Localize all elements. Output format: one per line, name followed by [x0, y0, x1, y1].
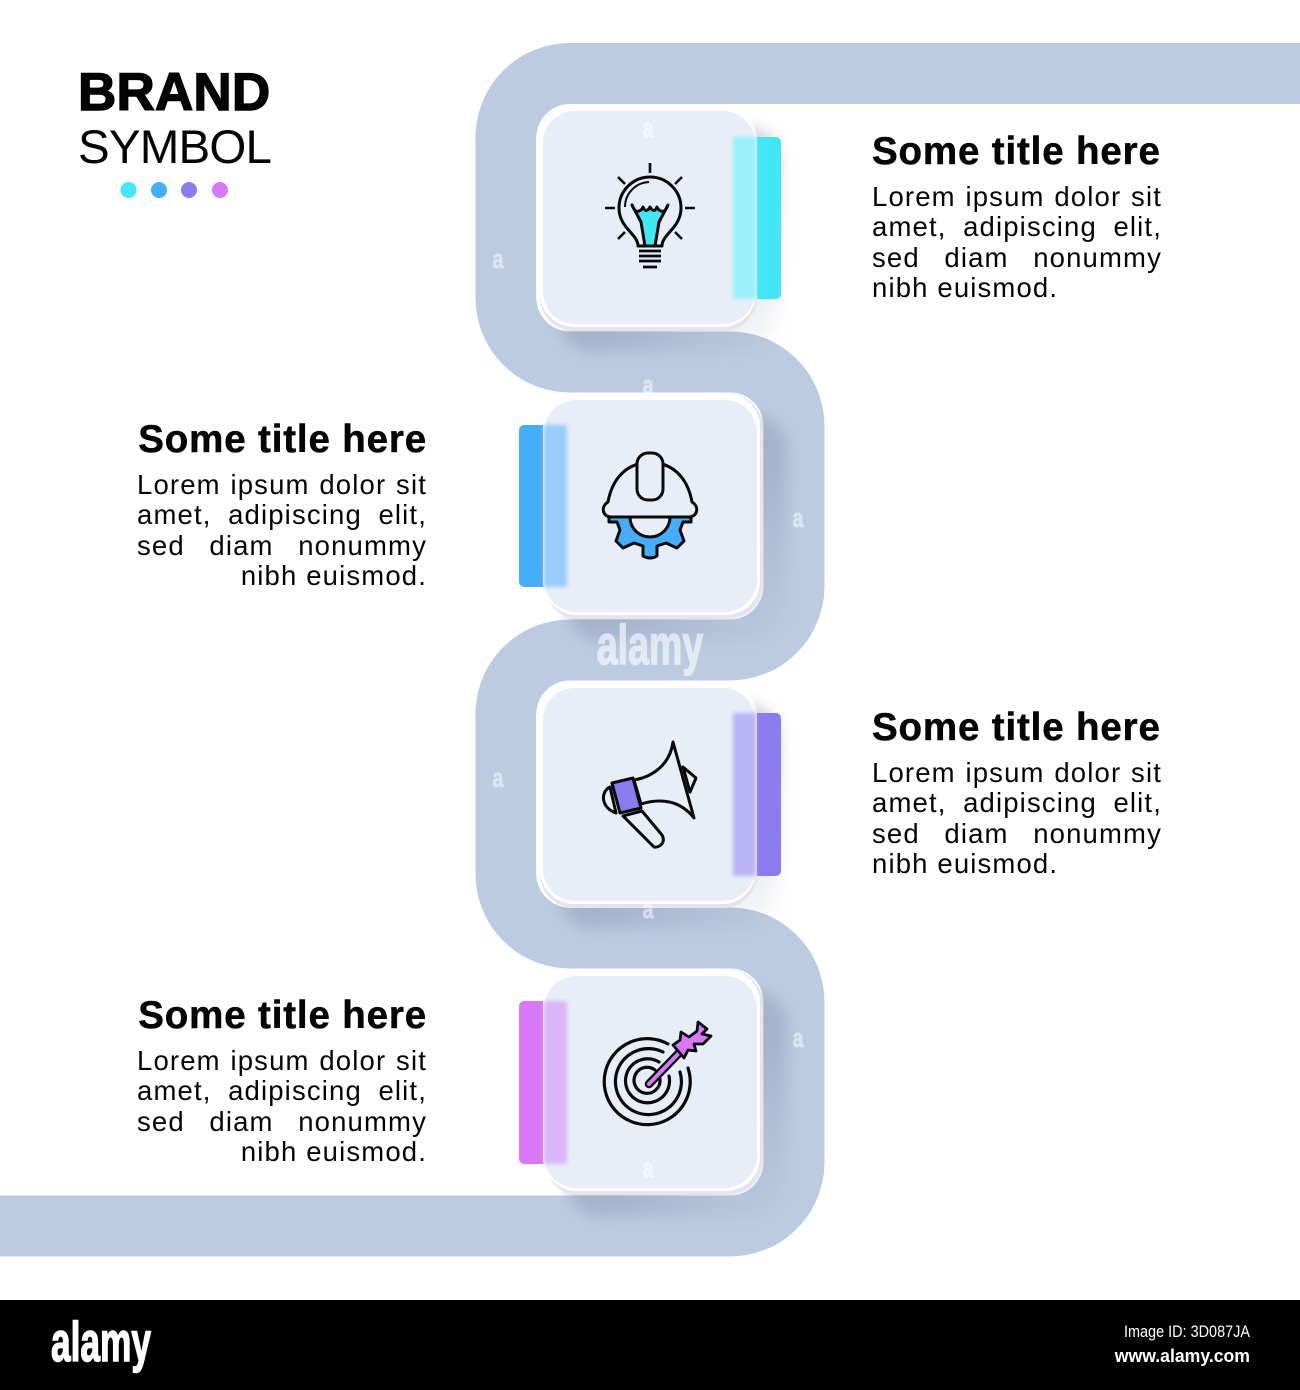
text block: step 4: amet, adipiscing elit,: [137, 1075, 427, 1106]
text block: step 4: Some title here: [138, 994, 427, 1037]
icon: target with arrow: [604, 1022, 711, 1125]
brand title: [78, 63, 271, 174]
text block: step 2: [137, 418, 427, 591]
icon: megaphone: [603, 742, 696, 847]
text block: step 1: nibh euismod.: [872, 272, 1058, 303]
watermark: alamy: alamy: [597, 615, 704, 677]
text block: step 4: Lorem ipsum dolor sit: [137, 1045, 427, 1076]
icon: light bulb: [605, 163, 695, 267]
text block: step 3: amet, adipiscing elit,: [872, 787, 1162, 818]
watermark letters: a: [643, 894, 654, 924]
watermark letters: a: [643, 113, 654, 143]
text block: step 3: nibh euismod.: [872, 848, 1058, 879]
text block: step 1: [872, 130, 1162, 303]
text block: step 3: sed diam nonummy: [872, 818, 1162, 849]
watermark letters: [493, 113, 804, 1183]
text block: step 2: Some title here: [138, 418, 427, 461]
card 3: [536, 681, 781, 929]
text block: step 2: amet, adipiscing elit,: [137, 499, 427, 530]
footer image id: Image ID: 3D087JA: [1124, 1323, 1250, 1341]
footer url: www.alamy.com: [1114, 1346, 1250, 1366]
watermark letters: a: [493, 763, 504, 793]
text block: step 2: sed diam nonummy: [137, 530, 427, 561]
text block: step 1: sed diam nonummy: [872, 242, 1162, 273]
brand dots: [120, 182, 228, 198]
watermark letters: a: [793, 503, 804, 533]
text block: step 2: Lorem ipsum dolor sit: [137, 469, 427, 500]
text block: step 4: [137, 994, 427, 1167]
watermark letters: a: [643, 370, 654, 400]
card 2: [519, 393, 788, 641]
text block: step 3: [872, 706, 1162, 879]
text block: step 3: Some title here: [872, 706, 1161, 749]
footer bar: [0, 1300, 1300, 1390]
text block: step 1: Lorem ipsum dolor sit: [872, 181, 1162, 212]
footer logo: alamy: [51, 1311, 151, 1373]
watermark letters: a: [793, 1023, 804, 1053]
text block: step 4: nibh euismod.: [241, 1136, 427, 1167]
text block: step 1: amet, adipiscing elit,: [872, 211, 1162, 242]
text block: step 4: sed diam nonummy: [137, 1106, 427, 1137]
text block: step 2: nibh euismod.: [241, 560, 427, 591]
icon: helmet with gear: [603, 453, 697, 558]
brand title: SYMBOL: [78, 121, 271, 174]
brand title: BRAND: [78, 63, 270, 122]
watermark letters: a: [493, 244, 504, 274]
card 4: [519, 969, 788, 1217]
text block: step 1: Some title here: [872, 130, 1161, 173]
watermark letters: a: [643, 1153, 654, 1183]
text block: step 3: Lorem ipsum dolor sit: [872, 757, 1162, 788]
card 1: [536, 104, 781, 352]
